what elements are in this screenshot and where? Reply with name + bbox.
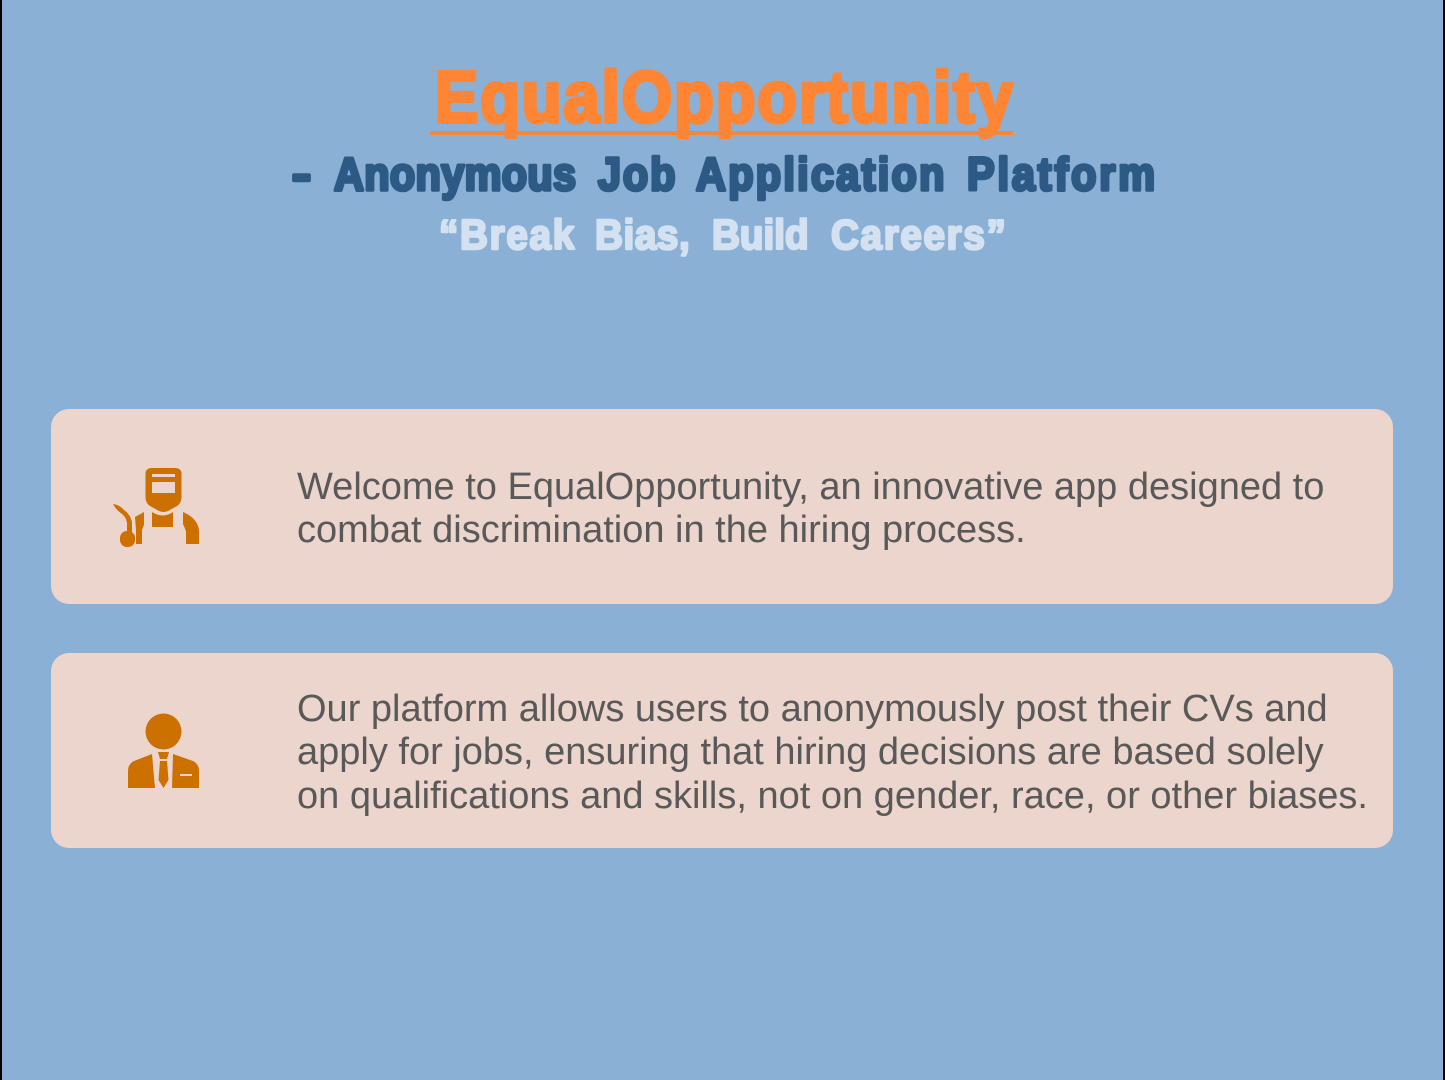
tagline: “Break [439, 210, 575, 258]
tagline: Build [712, 210, 809, 258]
subtitle: Application [696, 149, 944, 201]
subtitle [292, 148, 1155, 201]
text: platform: Our platform allows users to anonymously post their CVs and [297, 688, 1328, 730]
subtitle: Anonymous [334, 149, 576, 201]
subtitle: Job [598, 149, 675, 201]
text: welcome [297, 466, 1324, 551]
text: welcome: combat discrimination in the hiring process. [297, 509, 1026, 551]
header: title block [292, 57, 1155, 258]
text: welcome: Welcome to EqualOpportunity, an innovative app designed to [297, 466, 1324, 508]
icon: businessman [128, 714, 199, 788]
text: platform: on qualifications and skills, not on gender, race, or other biases. [297, 775, 1368, 817]
panel: welcome card [51, 409, 1393, 604]
title: EqualOpportunity: EqualOpportunity [435, 57, 1013, 138]
icon: welder [113, 468, 199, 547]
tagline: Careers” [831, 210, 1006, 258]
text: platform [297, 688, 1368, 817]
subtitle: Platform [967, 149, 1155, 201]
panel: platform card [51, 653, 1393, 848]
subtitle: - [292, 148, 311, 200]
tagline: Bias, [595, 210, 690, 258]
text: platform: apply for jobs, ensuring that hiring decisions are based solely [297, 731, 1324, 773]
tagline [439, 210, 1006, 258]
